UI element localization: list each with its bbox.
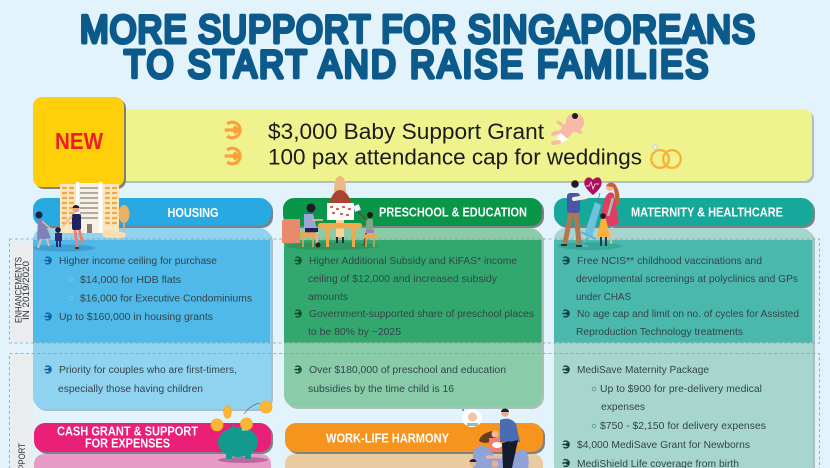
illustration: family and HDB flats (33, 182, 130, 252)
heading: cash grant and support: CASH GRANT & SUPPORT (57, 424, 198, 438)
maternity list: $4,000 MediSave Grant for Newborns (577, 439, 750, 451)
title: TO START AND RAISE FAMILIES (124, 42, 708, 86)
section label: enhancements in 2019/2020: ENHANCEMENTS (14, 257, 24, 323)
panel: housing (33, 228, 273, 411)
maternity list: No age cap and limit on no. of cycles for Assisted (577, 308, 799, 320)
maternity list: Reproduction Technology treatments (576, 326, 743, 338)
thought bubble (462, 409, 482, 427)
seated man (301, 204, 323, 248)
illustration: preschool classroom (282, 176, 378, 250)
piggy bank (217, 424, 258, 459)
woman with baby (479, 430, 502, 457)
section label backgrounds (12, 241, 33, 468)
preschool list: Over $180,000 of preschool and education (309, 364, 506, 376)
panel: cash grant and support (34, 423, 273, 468)
teacher (329, 176, 352, 243)
maternity list: $750 - $2,150 for delivery expenses (600, 420, 766, 432)
heading: housing: HOUSING (168, 205, 218, 220)
housing list: $14,000 for HDB flats (80, 274, 181, 286)
new badge (33, 97, 126, 189)
sofa (473, 446, 529, 468)
coins (211, 401, 272, 431)
housing list: especially those having children (58, 383, 203, 395)
heading: housing (33, 198, 273, 228)
dashed section borders (10, 239, 820, 468)
panel: work-life harmony (285, 423, 545, 468)
man (500, 409, 520, 468)
preschool list (294, 255, 534, 395)
new measures list (225, 119, 642, 170)
table (318, 223, 362, 247)
housing list (44, 255, 252, 395)
heart (584, 177, 602, 195)
panel: maternity and healthcare (554, 228, 815, 468)
section label: enhancements in 2019/2020: IN 2019/2020 (21, 261, 32, 320)
heading: work-life harmony: WORK-LIFE HARMONY (326, 430, 449, 446)
heading: maternity and healthcare: MATERNITY & HEALTHCARE (631, 204, 783, 220)
housing list: $16,000 for Executive Condominiums (80, 292, 252, 304)
housing list: Up to $160,000 in housing grants (59, 311, 213, 323)
tree and bushes (102, 205, 130, 238)
icon: baby (553, 113, 584, 143)
title: MORE SUPPORT FOR SINGAPOREANS (80, 7, 755, 51)
heading: maternity and healthcare (554, 198, 815, 228)
picture board (327, 203, 361, 220)
HDB building (60, 182, 119, 233)
woman (36, 212, 53, 248)
housing list: Priority for couples who are first-timers, (59, 364, 237, 376)
preschool list: Government-supported share of preschool places (309, 308, 534, 320)
new measures list: 100 pax attendance cap for weddings (268, 144, 642, 170)
woman (602, 182, 620, 244)
preschool list: Higher Additional Subsidy and KiFAS* income (309, 255, 517, 267)
maternity list: developmental screenings at polyclinics and GPs (576, 273, 798, 285)
preschool list: amounts (308, 291, 348, 303)
section label: enhancements in 2019/2020 (14, 257, 32, 323)
boy (55, 227, 62, 247)
maternity list: expenses (601, 401, 645, 413)
heading: cash grant and support (34, 423, 273, 454)
maternity list: under CHAS (576, 291, 631, 303)
maternity list (562, 255, 799, 468)
title (80, 7, 755, 86)
child (597, 213, 610, 246)
sofa (282, 219, 300, 243)
preschool list: to be 80% by ~2025 (308, 326, 401, 338)
maternity list: Free NCIS** childhood vaccinations and (577, 255, 762, 267)
illustration: piggy bank and coins (211, 401, 272, 463)
preschool list: subsidies by the time child is 16 (308, 383, 454, 395)
panel: new measures banner (33, 97, 814, 189)
heading: cash grant and support: FOR EXPENSES (85, 436, 170, 450)
heading: preschool and education: PRESCHOOL & EDUCATION (379, 204, 527, 220)
syringe (581, 193, 601, 246)
man (63, 205, 83, 248)
heading: preschool and education (283, 198, 544, 228)
preschool list: ceiling of $12,000 and increased subsidy (308, 273, 498, 285)
man with baby (561, 180, 586, 246)
new measures list: $3,000 Baby Support Grant (268, 119, 544, 144)
housing list: Higher income ceiling for purchase (59, 255, 217, 267)
children heads (470, 459, 498, 468)
new badge: NEW (55, 128, 103, 154)
icon: wedding rings (651, 144, 681, 168)
illustration: parents on sofa (462, 409, 529, 468)
panel: preschool and education (284, 228, 544, 409)
maternity list: Up to $900 for pre-delivery medical (600, 383, 762, 395)
illustration: maternity family (558, 177, 622, 250)
maternity list: MediSave Maternity Package (577, 364, 709, 376)
heading: work-life harmony (285, 423, 545, 454)
seated child (358, 212, 376, 247)
